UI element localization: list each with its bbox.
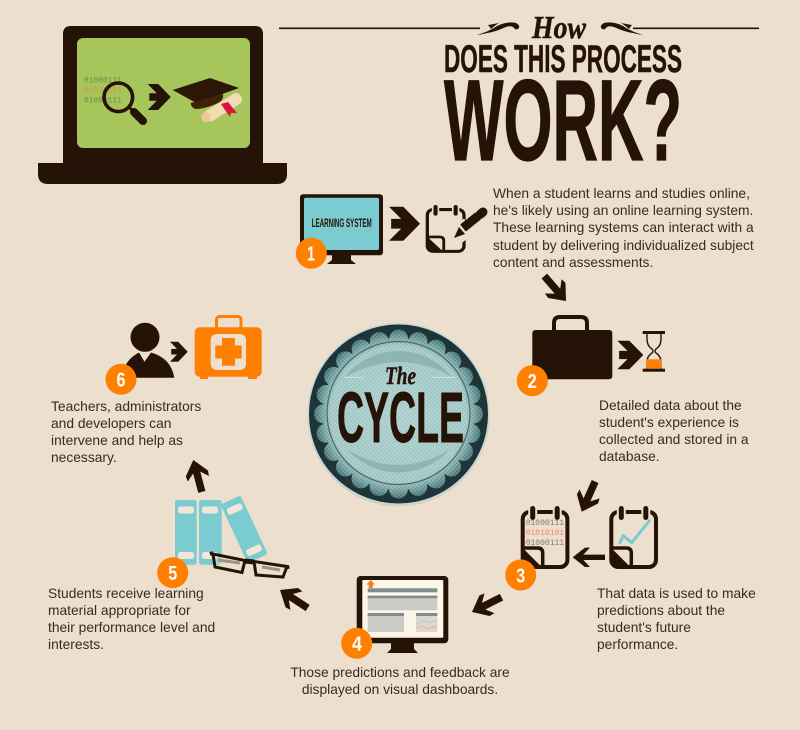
badge 5: 5 [168, 563, 177, 585]
step 5: learning material [48, 495, 288, 652]
text: step 4: displayed on visual dashboards. [302, 682, 498, 697]
icon: magnifying glass [104, 83, 143, 121]
badge 6: 6 [116, 370, 126, 392]
badge 6 [106, 364, 136, 395]
badge 2: 2 [528, 371, 537, 393]
text: step 5: material appropriate for [48, 603, 191, 618]
text: step 3: performance. [597, 637, 678, 652]
badge 1 [296, 238, 327, 269]
bottle cap [308, 323, 490, 506]
binary digits: 01010101 [84, 86, 122, 96]
text: step 2: student's experience is [599, 415, 739, 430]
step 1: learning system [296, 186, 754, 270]
badge: the cycle [308, 323, 490, 506]
icon: monitor: LEARNING SYSTEM [312, 218, 372, 230]
icon: glasses [210, 553, 288, 577]
badge 2 [517, 365, 548, 396]
text: step 6: Teachers, administrators [51, 399, 201, 414]
binary digits: 01000111 [84, 96, 122, 106]
ornament left [477, 22, 519, 35]
arrow [148, 84, 171, 110]
arrow: step 1 to 2 [536, 269, 575, 309]
step 6: intervene [51, 316, 262, 465]
title rule [279, 27, 759, 29]
icon: trend notepad [611, 506, 656, 567]
title [279, 9, 759, 185]
binary digits [84, 76, 122, 106]
step 4: dashboards [290, 576, 510, 697]
icon: notepad and pencil [427, 205, 483, 251]
text: step 6 [51, 399, 201, 465]
icon: hourglass [643, 331, 665, 372]
step 3: predictions [505, 506, 756, 652]
text: step 3: student's future [597, 620, 691, 635]
icon: laptop with data to graduation [38, 26, 287, 184]
laptop screen [77, 38, 250, 148]
text: step 3: predictions about the [597, 603, 725, 618]
text: step 6: intervene and help as [51, 433, 183, 448]
icon: monitor [300, 194, 383, 264]
the: The [385, 363, 416, 390]
text: step 1 [493, 186, 754, 270]
badge 1: 1 [307, 244, 315, 266]
arrow [573, 548, 605, 567]
arrow: step 4 to 5 [274, 580, 314, 618]
text: step 1: content and assessments. [493, 255, 653, 270]
arrow: step 2 to 3 [571, 477, 606, 516]
arrow [617, 341, 643, 369]
arrow: step 3 to 4 [467, 587, 507, 622]
text: step 5: interests. [48, 637, 104, 652]
icon: books [175, 495, 268, 565]
text: step 2: Detailed data about the [599, 398, 742, 413]
text: step 2: database. [599, 449, 660, 464]
icon: data notepad: 01000111 [526, 519, 564, 528]
badge 5 [157, 557, 188, 588]
text: step 3: That data is used to make [597, 586, 756, 601]
arrow [389, 207, 420, 241]
badge 3 [505, 560, 536, 590]
badge 4 [341, 628, 372, 659]
text: step 1: When a student learns and studies online, [493, 186, 750, 201]
step 2: data collected [517, 317, 749, 464]
binary digits: 01000111 [84, 76, 122, 86]
badge 3: 3 [516, 565, 525, 587]
text: step 4 [290, 665, 510, 697]
badge 4: 4 [352, 634, 363, 656]
text: step 5: Students receive learning [48, 586, 204, 601]
text: step 2: collected and stored in a [599, 432, 749, 447]
text: step 6: necessary. [51, 450, 117, 465]
icon: dashboard monitor [357, 576, 448, 653]
icon: graduation cap and diploma [173, 78, 244, 123]
arrow [170, 342, 188, 362]
icon: data notepad: 01000111 [526, 539, 564, 548]
text: step 4: Those predictions and feedback are [290, 665, 510, 680]
laptop body [38, 26, 287, 184]
title: How: How [531, 9, 587, 45]
icon: person [122, 323, 174, 378]
arrow: step 5 to 6 [182, 457, 213, 495]
icon: data notepad [523, 506, 567, 567]
text: step 1: student by delivering individualized subject [493, 238, 754, 253]
text: step 2 [599, 398, 749, 464]
text: step 5 [48, 586, 215, 652]
text: step 1: he's likely using an online learning system. [493, 203, 753, 218]
cycle: CYCLE [337, 379, 464, 458]
icon: first aid kit [195, 316, 262, 379]
icon: data notepad: 01010101 [526, 529, 564, 538]
text: step 6: and developers can [51, 416, 171, 431]
text: step 5: their performance level and [48, 620, 215, 635]
text: step 1: These learning systems can interact with a [493, 220, 754, 235]
ornament right [601, 22, 643, 35]
icon: briefcase [532, 317, 612, 379]
text: step 3 [597, 586, 756, 652]
